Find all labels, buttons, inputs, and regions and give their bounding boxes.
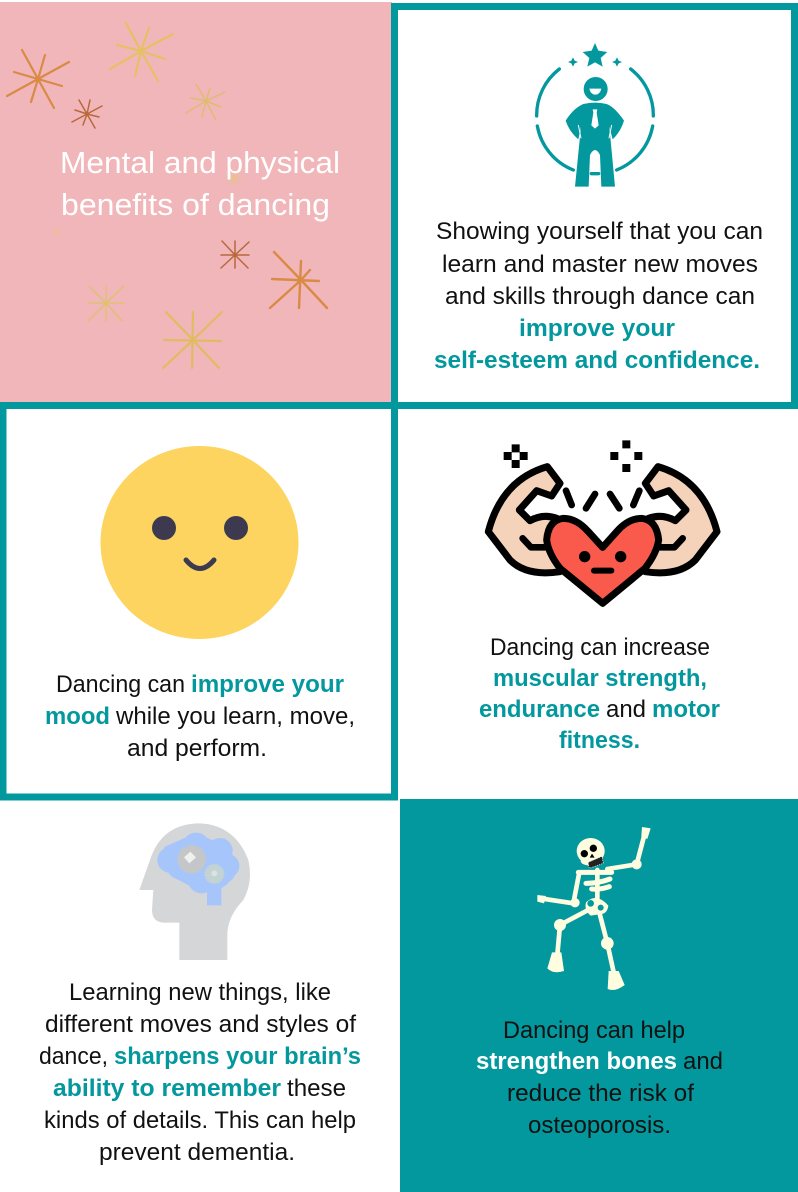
text: self-esteem: improve your bbox=[519, 315, 675, 342]
icon: confident person bbox=[537, 43, 653, 187]
text: muscular strength: fitness. bbox=[559, 727, 640, 754]
text: bones: reduce the risk of bbox=[507, 1080, 694, 1107]
text: brain: dance, bbox=[39, 1043, 108, 1070]
text: mood: while you learn, move, bbox=[115, 703, 355, 730]
text: muscular strength: muscular strength, bbox=[493, 665, 707, 692]
text: brain: different moves and styles of bbox=[45, 1011, 356, 1038]
panel: title bbox=[0, 2, 392, 403]
icon: gold sparkles bbox=[7, 23, 327, 368]
text: muscular strength bbox=[479, 634, 720, 754]
panel: bones bbox=[400, 799, 798, 1192]
text: brain: kinds of details. This can help bbox=[44, 1107, 356, 1134]
text: mood: and perform. bbox=[127, 735, 267, 762]
text: muscular strength: motor bbox=[652, 696, 720, 723]
text: self-esteem: and skills through dance can bbox=[445, 283, 755, 310]
text: self-esteem: learn and master new moves bbox=[442, 251, 758, 278]
text: brain: these bbox=[287, 1075, 346, 1102]
title: benefits of dancing bbox=[61, 187, 330, 222]
text: brain: Learning new things, like bbox=[69, 979, 331, 1006]
text: self-esteem: self-esteem and confidence. bbox=[434, 347, 760, 374]
text: self-esteem: Showing yourself that you can bbox=[436, 218, 763, 245]
icon: head with gears bbox=[139, 823, 250, 960]
icon: flexing heart bbox=[488, 440, 717, 603]
text: bones: and bbox=[683, 1048, 723, 1075]
text: muscular strength: Dancing can increase bbox=[490, 634, 710, 661]
text: mood: improve your bbox=[191, 671, 344, 698]
text: brain bbox=[39, 979, 361, 1166]
title bbox=[60, 145, 340, 222]
text: self-esteem bbox=[434, 218, 763, 374]
text: bones: Dancing can help bbox=[503, 1017, 685, 1044]
text: bones: osteoporosis. bbox=[528, 1112, 671, 1139]
text: mood bbox=[45, 671, 355, 762]
panel: brain bbox=[39, 823, 361, 1166]
icon: smiley face bbox=[100, 446, 298, 639]
text: brain: sharpens your brain’s bbox=[114, 1043, 361, 1070]
text: brain: ability to remember bbox=[53, 1075, 281, 1102]
panel: mood bbox=[3, 406, 394, 797]
text: brain: prevent dementia. bbox=[99, 1139, 295, 1166]
title: Mental and physical bbox=[60, 145, 340, 180]
text: bones: strengthen bones bbox=[476, 1048, 677, 1075]
text: mood: Dancing can bbox=[56, 671, 185, 698]
panel: muscular strength bbox=[479, 440, 720, 754]
panel: self-esteem bbox=[394, 6, 794, 406]
text: muscular strength: and bbox=[606, 696, 646, 723]
text: bones bbox=[476, 1017, 723, 1139]
text: muscular strength: endurance bbox=[479, 696, 600, 723]
icon: dancing skeleton bbox=[537, 827, 651, 990]
text: mood: mood bbox=[45, 703, 110, 730]
